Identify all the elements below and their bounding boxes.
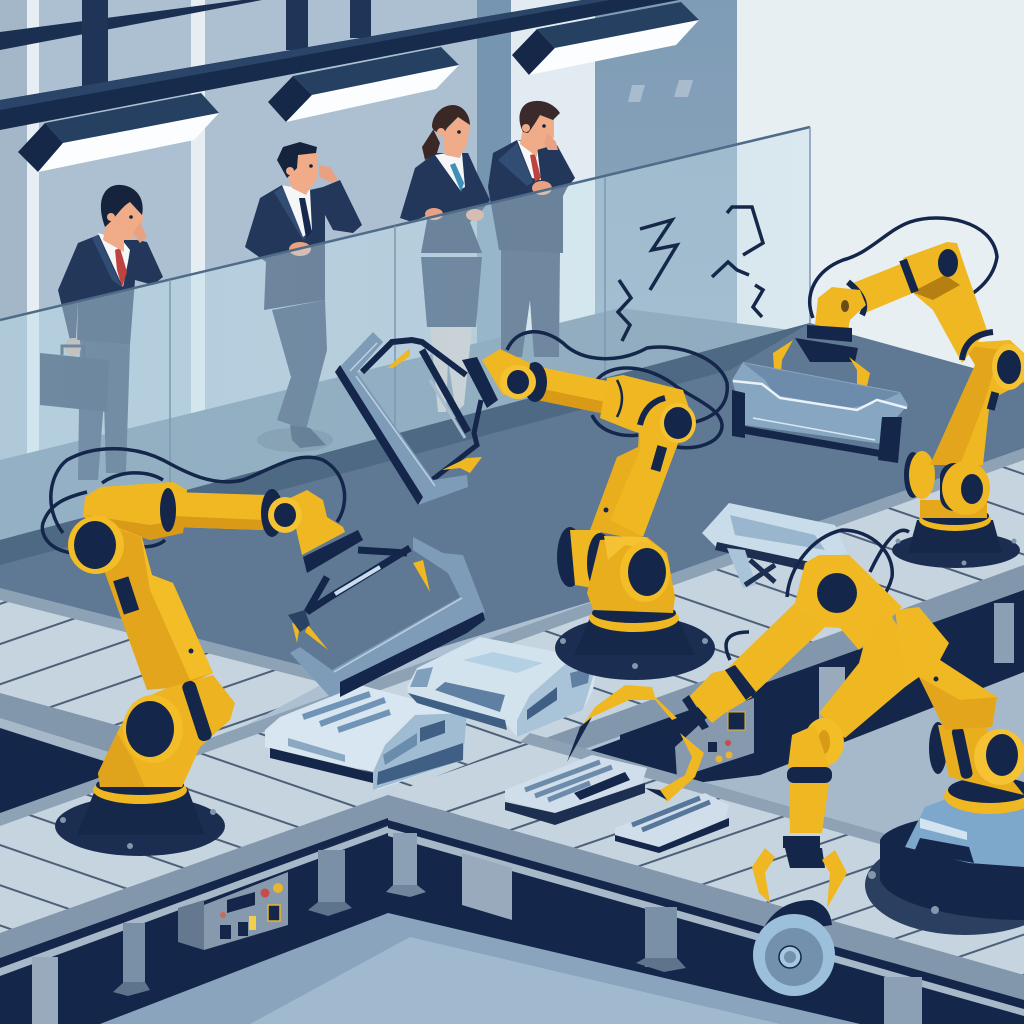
conveyor front-right [388, 733, 1024, 1016]
base [55, 775, 225, 856]
robot A: left arm [42, 449, 430, 856]
navy under-structure [0, 590, 1024, 1024]
part on conveyor 4 [615, 793, 729, 853]
part on conveyor, back right [702, 503, 847, 588]
upper arm [105, 515, 213, 690]
wrist [523, 362, 547, 402]
ceiling light 2 [268, 47, 459, 122]
ceiling light 1 [18, 93, 219, 172]
robot B: centre arm [362, 332, 727, 680]
shoulder and forearm [903, 242, 987, 363]
person 4 [488, 101, 575, 357]
control panel left [178, 872, 288, 950]
ceiling beams [0, 0, 679, 130]
base [555, 603, 715, 680]
part on conveyor 1 [265, 685, 467, 790]
body [98, 675, 235, 787]
briefcase [40, 346, 109, 412]
lower arm [930, 340, 1024, 465]
hanging gripper [752, 848, 847, 908]
frame held by robot A [288, 537, 485, 697]
robot D: front right arm [567, 530, 1024, 935]
floor behind glass [0, 308, 810, 600]
hanging arm [804, 718, 844, 766]
conveyor main surface [0, 448, 1024, 976]
shoulder [68, 516, 124, 574]
lower floor [100, 660, 1024, 1024]
person 3 [400, 105, 490, 412]
conveyor back-left [0, 588, 330, 763]
body [920, 500, 987, 518]
base [865, 777, 1024, 935]
part on conveyor 2 [407, 637, 598, 737]
part held by robot C [732, 362, 908, 463]
part on conveyor 3 [505, 755, 647, 825]
upper arm and second forearm [819, 612, 912, 738]
base [892, 507, 1020, 568]
factory floor [0, 323, 1024, 690]
lower arm [590, 420, 683, 540]
shoulder [929, 722, 947, 774]
forearm and elbow [537, 367, 620, 417]
gripper [773, 325, 870, 408]
wheel part [753, 900, 835, 996]
person 2 [245, 142, 362, 452]
shoulder [557, 527, 583, 587]
vibration marks [618, 207, 763, 341]
glass railing [0, 127, 810, 545]
first forearm [729, 603, 825, 693]
frame held by robot B [335, 332, 468, 505]
ceiling light 3 [512, 2, 699, 75]
forearm [83, 482, 187, 540]
conveyor legs [32, 603, 1014, 1024]
gripper [362, 340, 498, 480]
claws [567, 685, 704, 802]
gripper [292, 530, 430, 650]
control panel right [675, 698, 754, 778]
person 1 [40, 185, 163, 480]
robot C: back right arm [773, 218, 1024, 568]
